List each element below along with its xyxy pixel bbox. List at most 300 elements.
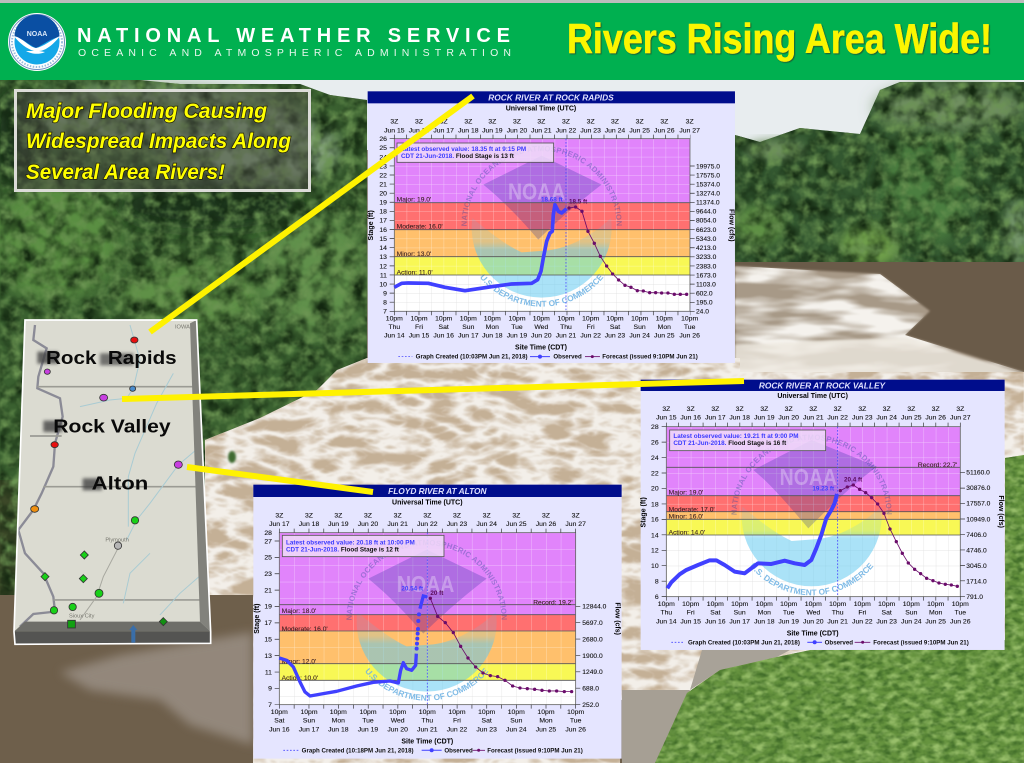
flow axis: 4213.0 (696, 245, 717, 252)
flow axis: 1249.0 (582, 669, 603, 676)
flow axis: 13274.0 (696, 191, 720, 198)
chart: Rock River at Rock Valley: Flow (cfs) (997, 495, 1004, 528)
chart: Rock River at Rock Valley: 3Z (883, 406, 891, 413)
chart: Rock River at Rock Valley: Jun 17 (729, 618, 750, 625)
chart: Rock River at Rock Rapids: Universal Time (UTC) (506, 106, 576, 113)
chart: Rock River at Rock Rapids: Jun 20 (531, 333, 552, 340)
forecast curve (429, 597, 573, 693)
chart legend: Graph Created (10:03PM Jun 21, 2018) (688, 639, 800, 646)
label: Rock Valley: Rock Valley (53, 415, 171, 436)
chart: Rock River at Rock Rapids: Fri (415, 324, 423, 331)
flood level labels: Major: 19.0' (397, 196, 431, 203)
chart: Floyd River at Alton: Jun 17 (299, 726, 319, 733)
chart: Rock River at Rock Rapids: 10pm (656, 315, 673, 322)
NOAA watermark: U.S. DEPARTMENT OF COMMERCE (750, 562, 874, 596)
chart: Rock River at Rock Rapids: 10pm (484, 315, 501, 322)
chart: Rock River at Rock Valley: 10pm (878, 601, 895, 608)
stage axis: 20 (379, 191, 387, 198)
chart legend (398, 354, 698, 361)
chart: Rock River at Rock Rapids: Sat (610, 324, 620, 331)
stage axis: 9 (268, 686, 272, 693)
flow axis: 5697.0 (582, 620, 603, 627)
stage axis: 15 (264, 636, 272, 643)
chart: Rock River at Rock Valley: 3Z (785, 406, 793, 413)
chart: Rock River at Rock Rapids: Jun 22 (556, 127, 576, 134)
flow axis: 602.0 (696, 290, 713, 297)
chart title bar (641, 380, 1005, 391)
chart: Rock River at Rock Rapids: Jun 16 (409, 127, 429, 134)
chart: Floyd River at Alton: Jun 25 (536, 726, 556, 733)
chart: Rock River at Rock Rapids: 10pm (410, 315, 428, 322)
stage axis: 23 (264, 571, 272, 578)
flow axis: 19975.0 (696, 163, 720, 170)
flood stage bands (394, 139, 690, 311)
stage axis: 16 (651, 517, 659, 524)
chart: Rock River at Rock Rapids: 3Z (390, 119, 398, 126)
chart: Floyd River at Alton: Universal Time (UTC) (392, 499, 463, 506)
chart: Floyd River at Alton: Mon (332, 718, 345, 725)
chart: Floyd River at Alton: Jun 16 (269, 726, 290, 733)
flow axis: 10949.0 (966, 516, 991, 523)
flow axis: 51160.0 (966, 470, 990, 477)
flood level labels: Major: 19.0' (669, 489, 703, 496)
chart: Rock River at Rock Valley: Jun 16 (705, 618, 726, 625)
chart: Rock River at Rock Valley: Jun 27 (950, 415, 971, 422)
chart: Floyd River at Alton: Stage (ft) (254, 604, 261, 634)
chart: Floyd River at Alton: Sun (510, 718, 523, 725)
callout: major flooding (16, 90, 310, 190)
chart: Rock River at Rock Valley: 10pm (780, 601, 797, 608)
chart: Rock River at Rock Valley: 3Z (760, 406, 768, 413)
chart: Rock River at Rock Rapids: 3Z (464, 119, 472, 126)
chart: Floyd River at Alton: Jun 17 (269, 521, 290, 528)
NOAA watermark (461, 146, 622, 307)
chart: Floyd River at Alton: 10pm (567, 709, 584, 716)
flow axis: 791.0 (966, 594, 983, 601)
flow axis: 5343.0 (696, 236, 717, 243)
chart: Floyd River at Alton: Jun 26 (565, 726, 586, 733)
chart: Floyd River at Alton: Jun 22 (417, 521, 438, 528)
flow axis: 12844.0 (582, 604, 607, 611)
chart: Floyd River at Alton: 10pm (508, 709, 525, 716)
chart: Floyd River at Alton: 3Z (394, 512, 402, 519)
chart: Rock River at Rock Valley: Jun 24 (901, 618, 922, 625)
stage axis: 21 (379, 181, 387, 188)
chart: Rock River at Rock Rapids: Jun 27 (679, 127, 700, 134)
NOAA watermark: NATIONAL OCEANIC AND ATMOSPHERIC ADMINISTRATION (346, 540, 507, 620)
chart: Floyd River at Alton: Jun 21 (387, 521, 408, 528)
chart: Rock River at Rock Valley: Jun 23 (876, 618, 897, 625)
chart: Rock River at Rock Valley: 10pm (682, 601, 700, 608)
flood level labels: Action: 10.0' (282, 675, 318, 682)
flood level labels: Minor: 16.0' (669, 514, 703, 521)
flow axis: 1714.0 (966, 578, 987, 585)
chart: Floyd River at Alton: Jun 23 (476, 726, 497, 733)
chart: Rock River at Rock Rapids: 10pm (631, 315, 648, 322)
far brown water (735, 262, 1024, 402)
chart: Rock River at Rock Rapids: Jun 19 (482, 127, 503, 134)
observed curve (394, 205, 567, 291)
flow axis: 17575.0 (696, 172, 720, 179)
chart: Rock River at Rock Valley: Jun 18 (729, 415, 750, 422)
chart: Floyd River at Alton: 3Z (423, 512, 431, 519)
chart: Rock River at Rock Valley: Jun 23 (852, 415, 873, 422)
arrow: map to Rock Valley chart (122, 381, 744, 399)
flow axis: 6623.0 (696, 227, 717, 234)
chart: Rock River at Rock Valley: 3Z (834, 406, 842, 413)
chart: Rock River at Rock Rapids: Jun 23 (580, 127, 601, 134)
stage axis: 28 (651, 424, 659, 431)
NOAA watermark: NATIONAL OCEANIC AND ATMOSPHERIC ADMINISTRATION (461, 146, 622, 226)
chart: Rock River at Rock Rapids: Jun 17 (458, 333, 479, 340)
chart: Floyd River at Alton: Tue (362, 718, 374, 725)
NOAA watermark: NATIONAL OCEANIC AND ATMOSPHERIC ADMINISTRATION (731, 434, 892, 515)
chart: Rock River at Rock Rapids: Jun 22 (580, 333, 601, 340)
chart: Rock River at Rock Valley: 10pm (658, 601, 675, 608)
chart: Floyd River at Alton: 3Z (305, 512, 313, 519)
stage axis: 18 (379, 209, 387, 216)
chart: Rock River at Rock Rapids: Jun 24 (629, 333, 650, 340)
gauge markers (31, 337, 182, 628)
chart: Rock River at Rock Rapids: Jun 18 (482, 333, 503, 340)
chart: Rock River at Rock Rapids: 18.68 ft (541, 196, 564, 203)
stage axis: 23 (379, 163, 387, 170)
chart: Rock River at Rock Rapids: Thu (560, 324, 572, 331)
chart: Floyd River at Alton: 3Z (275, 512, 283, 519)
latest observed callout (282, 535, 444, 557)
icon: NOAA logo: NOAA (27, 31, 47, 38)
chart: Floyd River at Alton: Jun 23 (447, 521, 467, 528)
latest observed callout (397, 143, 554, 162)
latest observed callout: Latest observed value: 19.21 ft at 9:00 PM (673, 433, 799, 440)
stage axis: 14 (379, 245, 387, 252)
chart: Rock River at Rock Rapids (368, 91, 735, 363)
stage axis: 22 (379, 172, 387, 179)
chart: Rock River at Rock Rapids: 3Z (587, 119, 595, 126)
chart: Rock River at Rock Rapids: Jun 21 (556, 333, 576, 340)
chart legend: Observed (825, 639, 853, 646)
concrete (622, 690, 690, 763)
chart: Rock River at Rock Valley: 10pm (756, 601, 773, 608)
stage axis: 25 (264, 555, 272, 562)
flow axis: 9644.0 (696, 209, 717, 216)
NOAA watermark: U.S. DEPARTMENT OF COMMERCE (366, 668, 488, 701)
NOAA watermark: NOAA (508, 179, 565, 205)
chart legend: Forecast (issued 9:10PM Jun 21) (487, 747, 583, 754)
chart: Rock River at Rock Rapids: 3Z (440, 119, 448, 126)
chart: Rock River at Rock Valley: 3Z (907, 406, 915, 413)
flow axis: 3045.0 (966, 563, 987, 570)
chart: Rock River at Rock Valley: 10pm (952, 601, 969, 608)
chart: Floyd River at Alton: 3Z (572, 512, 580, 519)
flow axis: 2680.0 (582, 636, 603, 643)
observed curve (667, 494, 837, 588)
title: National Weather Service: NATIONAL WEATHER SERVICE (77, 25, 510, 47)
stage axis: 11 (265, 669, 272, 676)
chart: Rock River at Rock Valley: Fri (858, 610, 867, 617)
stage axis: 25 (379, 145, 387, 152)
chart: Rock River at Rock Rapids: 3Z (611, 119, 619, 126)
chart: Floyd River at Alton: 20 ft (430, 590, 444, 597)
chart: Rock River at Rock Valley: Jun 24 (876, 415, 897, 422)
chart: Floyd River at Alton: Jun 21 (417, 726, 438, 733)
chart: Floyd River at Alton: 10pm (448, 709, 466, 716)
stage axis: 9 (383, 290, 387, 297)
NOAA watermark (346, 540, 507, 701)
chart: Rock River at Rock Valley: 3Z (687, 406, 695, 413)
stage axis: 8 (383, 300, 387, 307)
chart: Rock River at Rock Rapids: Sun (462, 324, 475, 331)
foam rapids (205, 358, 1024, 763)
flood level labels: Action: 11.0' (397, 270, 433, 277)
arrow: map to Rock Rapids chart (150, 96, 473, 332)
flood level labels (397, 196, 443, 277)
chart: Rock River at Rock Valley: 3Z (736, 406, 744, 413)
flow axis: 17557.0 (966, 501, 991, 508)
chart: Floyd River at Alton: Wed (391, 718, 405, 725)
chart: Rock River at Rock Rapids: Mon (486, 324, 499, 331)
chart: Rock River at Rock Rapids: Jun 26 (654, 127, 675, 134)
chart legend: Observed (444, 747, 473, 754)
chart: Rock River at Rock Valley: 3Z (809, 406, 817, 413)
chart: Floyd River at Alton: 20.54 ft (401, 585, 424, 592)
latest observed callout: CDT 21-Jun-2018. Flood Stage is 12 ft (286, 546, 400, 553)
flow axis: 688.0 (582, 686, 599, 693)
chart: Rock River at Rock Rapids: 10pm (508, 315, 526, 322)
stage axis: 11 (380, 272, 387, 279)
stage axis: 24 (379, 154, 387, 161)
flow axis: 4746.0 (966, 547, 987, 554)
chart: Rock River at Rock Rapids: Mon (658, 324, 671, 331)
label: Rock Rapids: Rock Rapids (46, 347, 177, 368)
stage axis: 7 (383, 309, 387, 316)
chart: Rock River at Rock Valley: Mon (758, 610, 771, 617)
flow axis: 11374.0 (696, 200, 720, 207)
stage axis: 15 (379, 236, 387, 243)
chart: Rock River at Rock Rapids: Tue (684, 324, 696, 331)
chart: Floyd River at Alton: 3Z (334, 512, 342, 519)
left tree line (0, 80, 370, 640)
chart: Floyd River at Alton: 10pm (389, 709, 406, 716)
chart: Rock River at Rock Rapids: Jun 25 (629, 127, 650, 134)
latest observed callout: CDT 21-Jun-2018. Flood Stage is 16 ft (673, 440, 787, 447)
chart: Rock River at Rock Valley: 10pm (927, 601, 944, 608)
header banner (0, 0, 1024, 80)
chart: Rock River at Rock Rapids: 3Z (660, 119, 668, 126)
chart: Rock River at Rock Valley: 3Z (956, 406, 964, 413)
chart: Rock River at Rock Valley: Thu (832, 610, 844, 617)
flood level labels (669, 462, 957, 537)
label: Alton: Alton (92, 472, 148, 493)
observed curve (279, 596, 427, 696)
arrow: map to Alton chart (187, 467, 373, 492)
chart: Rock River at Rock Valley: Jun 19 (778, 618, 799, 625)
chart: Rock River at Rock Rapids: Jun 18 (458, 127, 479, 134)
chart: Floyd River at Alton: 10pm (271, 709, 288, 716)
chart: Floyd River at Alton: 10pm (478, 709, 495, 716)
callout: major flooding: Major Flooding Causing (26, 100, 267, 123)
icon: NOAA logo (8, 13, 66, 71)
chart: Rock River at Rock Rapids: Jun 23 (605, 333, 625, 340)
chart: Floyd River at Alton: Jun 19 (358, 726, 378, 733)
chart: Rock River at Rock Rapids: 3Z (686, 119, 694, 126)
chart: Rock River at Rock Rapids: Jun 26 (679, 333, 700, 340)
chart: Rock River at Rock Valley: Jun 21 (827, 618, 848, 625)
NOAA watermark (731, 434, 892, 596)
state borders and roads (18, 325, 207, 627)
chart: Rock River at Rock Valley: Stage (ft) (640, 497, 647, 527)
callout: major flooding: Several Area Rivers! (26, 161, 225, 184)
chart title bar: ROCK RIVER AT ROCK RAPIDS (488, 92, 614, 102)
chart: Rock River at Rock Rapids: 10pm (582, 315, 599, 322)
forecast curve (567, 205, 688, 296)
chart: Rock River at Rock Valley: Jun 25 (901, 415, 922, 422)
chart: Rock River at Rock Valley: Sat (710, 610, 721, 617)
stage axis: 13 (379, 254, 387, 261)
chart: Rock River at Rock Rapids: 10pm (460, 315, 477, 322)
chart: Rock River at Rock Valley: 10pm (829, 601, 846, 608)
chart: Floyd River at Alton: Jun 26 (536, 521, 556, 528)
chart: Rock River at Rock Valley: Site Time (CDT) (787, 630, 839, 637)
chart: Rock River at Rock Rapids: Jun 15 (384, 127, 405, 134)
flood stage bands (279, 533, 576, 705)
chart: Floyd River at Alton: Thu (421, 718, 433, 725)
chart: Rock River at Rock Valley: Jun 17 (705, 415, 726, 422)
NOAA watermark: NOAA (780, 464, 837, 490)
stage axis: 22 (651, 470, 659, 477)
flow axis: 7406.0 (966, 532, 987, 539)
chart: Rock River at Rock Valley: Jun 20 (803, 618, 824, 625)
chart: Floyd River at Alton: Jun 20 (358, 521, 378, 528)
chart: Rock River at Rock Rapids: Stage (ft) (368, 210, 375, 240)
chart: Rock River at Rock Rapids: Jun 21 (531, 127, 552, 134)
chart: Rock River at Rock Valley: Jun 26 (950, 618, 971, 625)
stage axis: 21 (264, 587, 272, 594)
chart: Floyd River at Alton: Mon (539, 718, 553, 725)
chart: Rock River at Rock Rapids: Jun 17 (433, 127, 454, 134)
flow axis: 1103.0 (696, 281, 716, 288)
chart: Rock River at Rock Valley: Thu (660, 610, 672, 617)
stage axis: 19 (379, 200, 387, 207)
chart: Floyd River at Alton (253, 484, 622, 759)
flood level labels (282, 599, 573, 682)
chart: Rock River at Rock Valley: 10pm (707, 601, 724, 608)
stage axis: 12 (651, 548, 659, 555)
chart: Rock River at Rock Rapids: 10pm (386, 315, 403, 322)
chart: Rock River at Rock Valley: Sun (734, 610, 746, 617)
flow axis: 15374.0 (696, 181, 720, 188)
NOAA watermark: NOAA (397, 571, 454, 597)
subtitle: Oceanic and Atmospheric Administration: OCEANIC AND ATMOSPHERIC ADMINISTRATION (78, 47, 511, 59)
chart: Rock River at Rock Valley: Jun 22 (827, 415, 848, 422)
chart: Rock River at Rock Rapids: Tue (511, 324, 523, 331)
stage axis: 6 (655, 594, 659, 601)
brown water lower left (0, 595, 253, 763)
chart title bar: FLOYD RIVER AT ALTON (388, 486, 487, 496)
chart: Rock River at Rock Rapids: 10pm (681, 315, 698, 322)
stage axis: 7 (268, 702, 272, 709)
stage axis: 10 (651, 563, 659, 570)
chart: Floyd River at Alton: Sat (274, 718, 285, 725)
chart: Rock River at Rock Valley: Wed (806, 610, 820, 617)
stage axis: 17 (379, 218, 387, 225)
flood level labels: Record: 22.7' (918, 462, 957, 469)
chart: Rock River at Rock Rapids: Thu (388, 324, 400, 331)
chart: Rock River at Rock Rapids: Jun 24 (605, 127, 625, 134)
chart: Floyd River at Alton: Jun 18 (299, 521, 319, 528)
stage axis: 26 (651, 439, 659, 446)
stage axis: 18 (651, 501, 659, 508)
chart: Floyd River at Alton: 10pm (537, 709, 555, 716)
chart: Floyd River at Alton: 10pm (359, 709, 377, 716)
chart: Floyd River at Alton: 10pm (300, 709, 318, 716)
latest observed callout: Latest observed value: 20.18 ft at 10:00 PM (286, 539, 415, 546)
chart: Rock River at Rock Rapids: Wed (534, 324, 548, 331)
chart legend: Forecast (issued 9:10PM Jun 21) (873, 639, 969, 646)
chart: Rock River at Rock Valley: Universal Time (UTC) (777, 393, 848, 400)
stage axis: 16 (379, 227, 387, 234)
chart: Rock River at Rock Valley: Tue (783, 610, 795, 617)
chart: Rock River at Rock Valley: Jun 15 (680, 618, 701, 625)
forecast curve (839, 483, 959, 588)
chart: Floyd River at Alton: Tue (570, 718, 582, 725)
chart legend: Graph Created (10:18PM Jun 21, 2018) (302, 747, 414, 754)
chart: Rock River at Rock Rapids: 3Z (636, 119, 644, 126)
chart: Floyd River at Alton: 3Z (364, 512, 372, 519)
chart: Rock River at Rock Rapids: Jun 19 (507, 333, 527, 340)
stage axis: 12 (379, 263, 387, 270)
flood level labels: Moderate: 16.0' (397, 224, 443, 231)
chart: Rock River at Rock Rapids: 3Z (415, 119, 423, 126)
chart: Rock River at Rock Rapids: Jun 16 (433, 333, 454, 340)
chart: Floyd River at Alton: Sun (303, 718, 315, 725)
chart: Rock River at Rock Rapids: Sun (634, 324, 646, 331)
latest observed callout: CDT 21-Jun-2018. Flood Stage is 13 ft (401, 153, 515, 160)
chart: Rock River at Rock Valley: 3Z (858, 406, 866, 413)
stage axis: 26 (379, 136, 387, 143)
chart: Rock River at Rock Rapids: 3Z (562, 119, 570, 126)
chart: Rock River at Rock Valley: 10pm (731, 601, 749, 608)
stage axis: 14 (651, 532, 659, 539)
flow axis: 8054.0 (696, 218, 717, 225)
flood level labels: Minor: 13.0' (397, 251, 431, 258)
flow axis: 252.0 (582, 702, 599, 709)
chart: Rock River at Rock Rapids: 10pm (435, 315, 453, 322)
map place labels: IOWA (175, 325, 190, 331)
flood level labels: Moderate: 16.0' (282, 626, 328, 633)
chart: Rock River at Rock Rapids: Jun 25 (654, 333, 675, 340)
chart: Rock River at Rock Valley: Jun 19 (754, 415, 775, 422)
chart: Rock River at Rock Rapids: 10pm (606, 315, 624, 322)
chart legend: Observed (553, 354, 582, 361)
chart: Rock River at Rock Rapids: Flow (cfs) (727, 209, 734, 242)
chart: Rock River at Rock Valley: Jun 16 (680, 415, 701, 422)
chart: Rock River at Rock Valley: 20.4 ft (844, 476, 863, 483)
chart: Rock River at Rock Valley: Jun 25 (925, 618, 946, 625)
stage axis: 27 (264, 538, 272, 545)
stage axis: 10 (379, 281, 387, 288)
chart: Rock River at Rock Valley: Jun 21 (803, 415, 824, 422)
chart: Floyd River at Alton: Jun 19 (328, 521, 349, 528)
chart: Rock River at Rock Valley: 3Z (711, 406, 719, 413)
chart: Floyd River at Alton: 3Z (483, 512, 491, 519)
map panel: river gauge locations: Sioux City (69, 614, 95, 620)
chart: Rock River at Rock Valley: Jun 26 (925, 415, 946, 422)
flow axis: 2383.0 (696, 263, 717, 270)
stage axis: 17 (264, 620, 272, 627)
flow axis: 1900.0 (582, 653, 603, 660)
chart: Rock River at Rock Rapids: Fri (587, 324, 595, 331)
